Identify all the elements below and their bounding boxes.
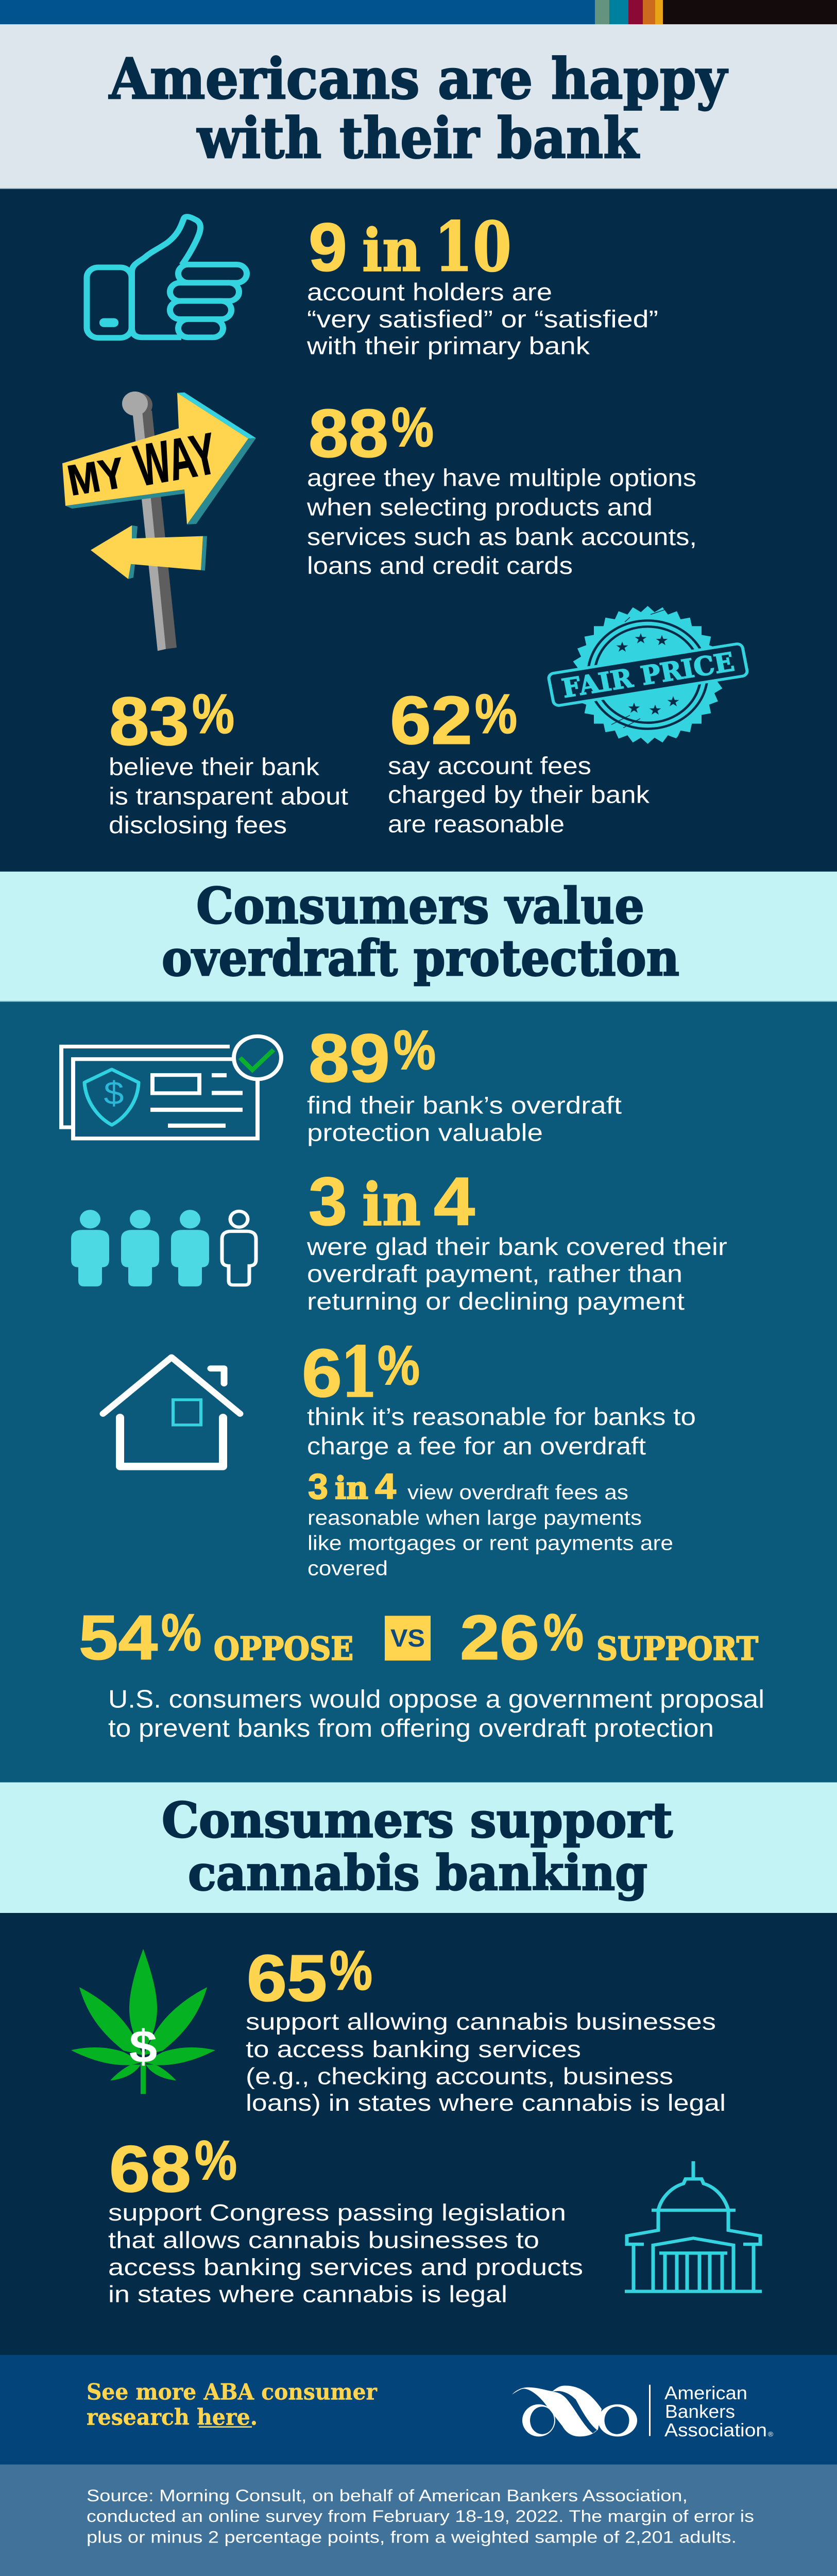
stat: 9 in 10 [309,207,511,287]
stat: 61%: 6 [302,1335,342,1411]
icon: fair price stamp [548,606,748,744]
text: multiple options: loans and credit cards [307,552,573,579]
logo: american bankers association: American [664,2382,747,2403]
text: transparent about fees: disclosing fees [109,811,287,839]
text: account holders: “very satisfied” or “satisfied” [307,306,658,333]
stat: 3 in 4: in [362,1171,421,1239]
icon: capitol building [625,2161,762,2292]
text: multiple options: agree they have multiple options [307,464,696,492]
text: reasonable fees: charged by their bank [388,781,650,808]
text: oppose government proposal: U.S. consumers would oppose a government proposal [108,1685,764,1713]
text: transparent about fees: believe their bank [109,753,319,781]
text: account holders: with their primary bank [306,332,590,360]
logo: american bankers association: Association [664,2420,767,2441]
text: cannabis businesses access: (e.g., checking accounts, business [246,2064,673,2090]
source text: Source: Morning Consult, on behalf of American Bankers Association, [87,2487,688,2505]
stat: 61%: % [378,1334,420,1397]
text: transparent about fees [109,753,348,839]
stat: 89%: % [394,1019,436,1081]
title: with their bank [197,106,640,171]
stat: 68%: % [195,2129,237,2192]
text: congress legislation [108,2200,583,2308]
stat: 9 in 10: in [362,216,421,285]
stat: 3 in 4 [309,1163,475,1240]
text: account holders [306,279,658,360]
stat: 9 in 10: 9 [309,209,347,285]
text: overdraft valuable: find their bank’s overdraft [307,1092,622,1119]
text: multiple options [306,464,697,579]
stat: 61%: 1 [340,1332,378,1413]
text: cannabis businesses access [246,2009,726,2116]
panel: cannabis banking [0,1913,837,2355]
stat with text: 3 in 4 large payments: covered [308,1556,388,1580]
panel: satisfaction [0,189,837,872]
stat: 62%: % [475,683,517,745]
stat: 68% [109,2129,237,2206]
text: overdraft valuable: protection valuable [307,1119,543,1146]
text: reasonable fees: are reasonable [388,810,565,838]
stat: 26% support: 26 [460,1602,539,1673]
stat: 89% [309,1019,436,1096]
icon: house [103,1357,240,1466]
stat: 65% [247,1940,372,2015]
stat with text: 3 in 4 large payments: 3 [308,1466,328,1506]
stat: 88%: % [391,396,434,459]
text: congress legislation: in states where cannabis is legal [108,2282,507,2308]
stat with text: 3 in 4 large payments: 4 [375,1466,396,1506]
text: glad bank covered: overdraft payment, rather than [307,1260,682,1287]
text: reasonable to charge: charge a fee for an overdraft [307,1432,646,1460]
text: account holders: account holders are [307,279,552,306]
logo: american bankers association: Bankers [665,2401,735,2422]
text: reasonable fees: say account fees [388,752,591,779]
stat: 83%: 83 [109,683,189,759]
text: reasonable to charge [307,1403,696,1460]
stat: 61% [302,1332,420,1413]
text: overdraft valuable [307,1092,622,1146]
panel: source note [0,2465,837,2576]
heading: cannabis banking [188,1845,647,1902]
panel: call to action and logo [0,2355,837,2465]
icon: protected cheque [61,1036,281,1139]
icon: thumbs up [87,217,247,338]
top colour bar [0,0,837,24]
text: glad bank covered: were glad their bank covered their [306,1233,727,1261]
text: cannabis businesses access: to access banking services [246,2037,581,2062]
text: reasonable to charge: think it’s reasonable for banks to [307,1403,696,1430]
logo: american bankers association: ® [768,2431,773,2438]
stat with text: 3 in 4 large payments: reasonable when large payments [308,1506,642,1529]
vs badge: VS [390,1624,425,1652]
banner: cannabis heading [0,1783,837,1913]
stat: 3 in 4: 4 [434,1163,475,1240]
stat: 54% oppose: % [161,1603,201,1662]
call to action: research here. [87,2404,258,2430]
heading: Consumers support [162,1792,673,1849]
heading [162,1792,673,1902]
source text: conducted an online survey from February 18-19, 2022. The margin of error is [87,2507,754,2526]
stat: 26% support: SUPPORT [596,1630,758,1668]
title [109,46,728,171]
text: multiple options: when selecting products and [306,494,653,521]
stat: 9 in 10: 10 [434,207,511,287]
call to action [87,2379,378,2430]
call to action: See more ABA consumer [87,2379,378,2405]
icon: fair price stamp: FAIR PRICE [559,647,737,704]
text: transparent about fees: is transparent about [109,783,348,810]
stat: 26% support [460,1602,758,1673]
heading [162,877,679,987]
title: Americans are happy [109,46,728,112]
stat: 3 in 4: 3 [309,1163,347,1240]
logo mark [512,2386,637,2436]
stat: 26% support: % [543,1603,584,1662]
stat: 68%: 68 [109,2132,191,2206]
title banner [0,24,837,189]
text: oppose government proposal: to prevent banks from offering overdraft protection [108,1714,714,1742]
heading: Consumers value [196,877,644,935]
stat: 89%: 89 [309,1020,390,1096]
banner: overdraft heading [0,872,837,1002]
text: congress legislation: support Congress passing legislation [108,2200,566,2226]
source text: plus or minus 2 percentage points, from a weighted sample of 2,201 adults. [87,2528,737,2547]
text: congress legislation: access banking services and products [108,2255,583,2280]
icon: my way signpost: WAY [129,421,223,499]
text: congress legislation: that allows cannabis businesses to [108,2227,539,2253]
stat: 88%: 88 [309,395,388,471]
stat with text: 3 in 4 large payments: in [335,1470,368,1506]
stat: 54% oppose [79,1602,353,1673]
text: glad bank covered: returning or declining payment [307,1287,685,1315]
stat: 83% [109,683,234,759]
stat with text: 3 in 4 large payments [308,1466,673,1580]
icon: cannabis leaf with dollar: $ [129,2021,157,2072]
text: cannabis businesses access: support allowing cannabis businesses [246,2009,716,2035]
text: multiple options: services such as bank accounts, [307,523,697,550]
text: glad bank covered [306,1233,727,1315]
stat with text: 3 in 4 large payments: like mortgages or rent payments are [308,1531,673,1554]
stat: 54% oppose: 54 [79,1602,158,1673]
stat: 65%: 65 [247,1941,327,2015]
stat: 62%: 62 [390,682,472,758]
text: oppose government proposal [108,1685,764,1742]
icon: four people, three filled [71,1210,256,1286]
source text [87,2487,754,2547]
stat with text: 3 in 4 large payments: view overdraft fees as [407,1481,628,1503]
stat: 83%: % [192,683,234,745]
icon: protected cheque: $ [104,1076,124,1112]
icon: my way signpost: MY [64,449,129,505]
vs badge [385,1616,431,1660]
stat: 65%: % [330,1940,372,2002]
logo: american bankers association [512,2382,773,2441]
panel: overdraft protection [0,1002,837,1783]
heading: overdraft protection [162,929,679,987]
stat: 62% [390,682,517,758]
text: cannabis businesses access: loans) in states where cannabis is legal [246,2090,726,2116]
stat: 54% oppose: OPPOSE [214,1630,353,1668]
icon: cannabis leaf with dollar [71,1949,215,2094]
text: reasonable fees [388,752,650,838]
stat: 88% [309,395,434,471]
icon: my way signpost [62,392,256,651]
